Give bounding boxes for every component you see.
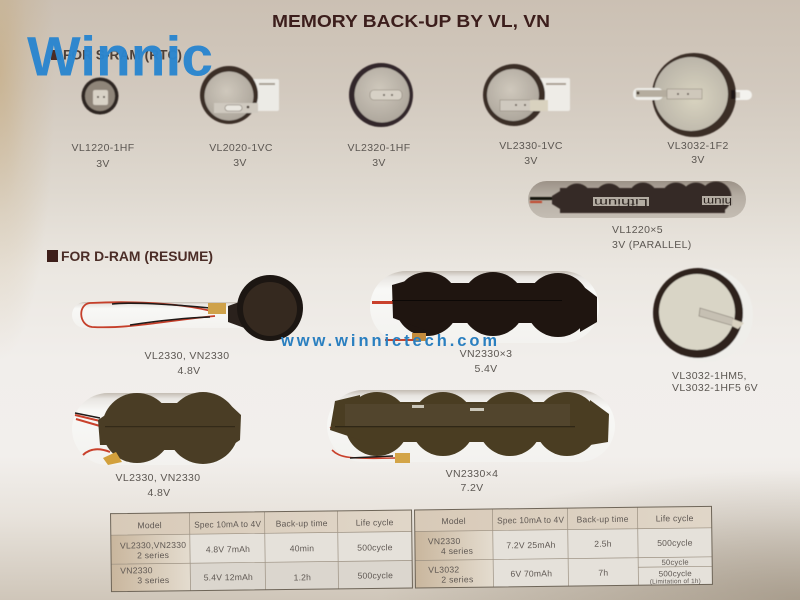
label: VN2330x3: VN2330×3 (460, 348, 512, 360)
battery pack: VL1220x5: Lithium (594, 196, 648, 207)
label: VL2020-1VC: VL2020-1VC (209, 142, 273, 154)
table: right: 2 series (441, 574, 474, 585)
table: right: 500cycle (657, 538, 693, 548)
battery: VL2320-1HF (349, 63, 413, 127)
table: right: VL3032 (428, 564, 459, 575)
table: right (415, 506, 712, 588)
label: VL2330, VN2330 upper: VL2330, VN2330 (145, 350, 229, 362)
battery: VL2330-1VC (483, 64, 570, 126)
table: right: 7.2V 25mAh (506, 540, 556, 550)
label: VL2330, VN2330 lower: VL2330, VN2330 (116, 472, 200, 484)
label: VL1220-1HF (71, 142, 135, 170)
table: left: 4.8V 7mAh (206, 544, 250, 555)
table: left: VL2330,VN2330 (120, 540, 186, 551)
label: VL1220x5 (612, 224, 692, 251)
table: left: Back-up time (276, 518, 328, 529)
label: VN2330x4: VN2330×4 (446, 468, 498, 480)
battery pack: VN2330x4 (327, 390, 615, 463)
label: VL2020-1VC (209, 142, 273, 169)
table: left: Life cycle (356, 517, 394, 528)
heading: for D-RAM: FOR D-RAM (RESUME) (61, 248, 213, 264)
watermark: Winnic logo: Winnic (27, 24, 213, 88)
battery: VL2330, VN2330 with lead wires (72, 275, 303, 341)
label: VL2330-1VC: 3V (524, 155, 538, 167)
table: left: 3 series (137, 575, 170, 585)
table: left: 500cycle (357, 542, 393, 553)
table: right: 2.5h (594, 539, 612, 549)
label: VL1220x5: VL1220×5 (612, 224, 663, 236)
battery: VL3032-1HM5 (653, 268, 753, 362)
heading: for S-RAM: FOR S-RAM (RTC) (63, 46, 182, 62)
label: VN2330x4: 7.2V (460, 482, 484, 494)
label: VL3032-1HM5: VL3032-1HM5, (672, 370, 747, 382)
label: VL2330, VN2330 lower: 4.8V (148, 487, 170, 499)
label: VL2330, VN2330 lower (116, 472, 200, 499)
table: left: Spec 10mA to 4V (194, 519, 261, 530)
title: MEMORY BACK-UP BY VL, VN (272, 11, 550, 31)
label: VL1220-1HF: VL1220-1HF (71, 142, 135, 154)
label: VL2330, VN2330 upper: 4.8V (178, 365, 200, 377)
table: left: Model (137, 520, 162, 530)
table: left: 1.2h (293, 572, 311, 582)
label: VL3032-1F2 (667, 140, 729, 166)
table: right: Spec 10mA to 4V (497, 515, 564, 525)
battery pack: VL1220x5: hium (703, 195, 732, 206)
battery: VL1220-1HF (82, 78, 118, 114)
label: VL2320-1HF (347, 142, 411, 169)
table: left (111, 510, 412, 592)
label: VL2320-1HF: 3V (372, 157, 386, 169)
table: right: 4 series (441, 546, 473, 556)
label: VN2330x3: 5.4V (474, 363, 498, 375)
label: VL1220-1HF: 3V (96, 158, 110, 170)
table: right: (Limitation of 1h) (650, 578, 701, 586)
battery: VL3032-1F2 (633, 53, 752, 137)
battery pack: VL1220x5 (528, 181, 746, 218)
label: VN2330x4 (446, 468, 498, 494)
label: VL1220x5: 3V (PARALLEL) (612, 239, 692, 251)
table: left: VN2330 (120, 565, 153, 576)
table: right: 7h (598, 568, 608, 578)
table: left: 40min (290, 543, 314, 553)
table: right: Life cycle (656, 513, 694, 524)
label: VL3032-1F2: 3V (691, 154, 705, 166)
label: VN2330x3 (460, 348, 512, 375)
label: VL2330-1VC (499, 140, 563, 167)
table: right: Back-up time (577, 514, 629, 524)
table: right: 50cycle (662, 558, 689, 567)
table: left: 500cycle (357, 570, 393, 581)
label: VL3032-1F2: VL3032-1F2 (667, 140, 729, 152)
label: VL2320-1HF: VL2320-1HF (347, 142, 411, 154)
label: VL3032-1HM5 (672, 370, 758, 394)
table: left: 2 series (137, 550, 169, 560)
table: right: Model (441, 516, 466, 526)
table: left: 5.4V 12mAh (204, 572, 253, 583)
watermark: website url: www.winnictech.com (280, 332, 497, 350)
label: VL2330, VN2330 upper (145, 350, 229, 377)
battery: VL2020-1VC (200, 66, 279, 124)
label: VL2330-1VC: VL2330-1VC (499, 140, 563, 152)
table: right: 500cycle (659, 569, 692, 578)
table: right: VN2330 (428, 536, 461, 546)
table: right: 6V 70mAh (510, 568, 552, 579)
specification tables (111, 506, 712, 592)
label: VL2020-1VC: 3V (233, 157, 247, 169)
label: VL3032-1HM5: VL3032-1HF5 6V (672, 382, 758, 394)
battery pack: VN2330x3 (370, 271, 599, 343)
battery pack: VL2330, VN2330 double (72, 392, 241, 465)
